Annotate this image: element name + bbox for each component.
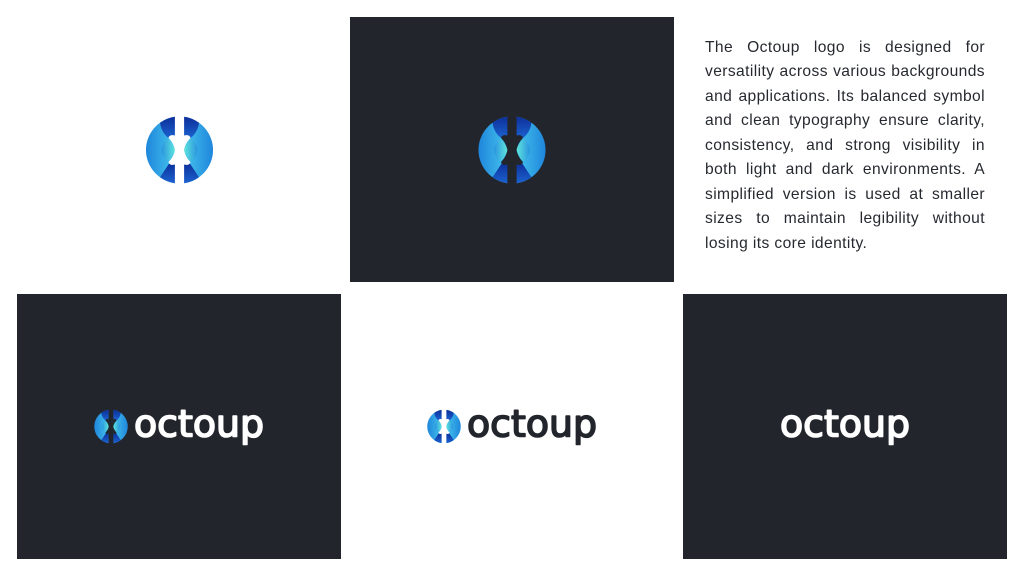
icon: small symbol on white bbox=[427, 410, 461, 444]
icon: logo symbol on dark bbox=[478, 116, 546, 184]
description text block: losing its core identity. bbox=[705, 234, 867, 252]
description text block: The Octoup logo is designed for bbox=[705, 38, 985, 56]
description text block: simplified version is used at smaller bbox=[705, 186, 985, 202]
description text block: and clean typography ensure clarity, bbox=[705, 112, 985, 129]
panel: dark bottom right bbox=[683, 294, 1007, 558]
logo lockup on dark: symbol and wordmark bbox=[94, 402, 264, 446]
panel: dark top centre bbox=[350, 17, 674, 282]
description text block: and applications. Its balanced symbol bbox=[705, 88, 985, 104]
wordmark only on dark: octoup bbox=[780, 402, 910, 446]
icon: logo symbol on white bbox=[146, 116, 213, 184]
wordmark on white: octoup bbox=[467, 402, 597, 446]
panel: dark bottom left bbox=[17, 294, 341, 558]
description text block: consistency, and strong visibility in bbox=[705, 136, 985, 154]
description text block: both light and dark environments. A bbox=[705, 161, 985, 178]
description text block: sizes to maintain legibility without bbox=[705, 210, 985, 227]
description text block: versatility across various backgrounds bbox=[705, 63, 985, 80]
icon: small symbol on dark bbox=[94, 410, 128, 444]
logo lockup on white: symbol and wordmark bbox=[427, 402, 597, 446]
wordmark on dark: octoup bbox=[134, 402, 264, 446]
description text block bbox=[705, 38, 985, 252]
